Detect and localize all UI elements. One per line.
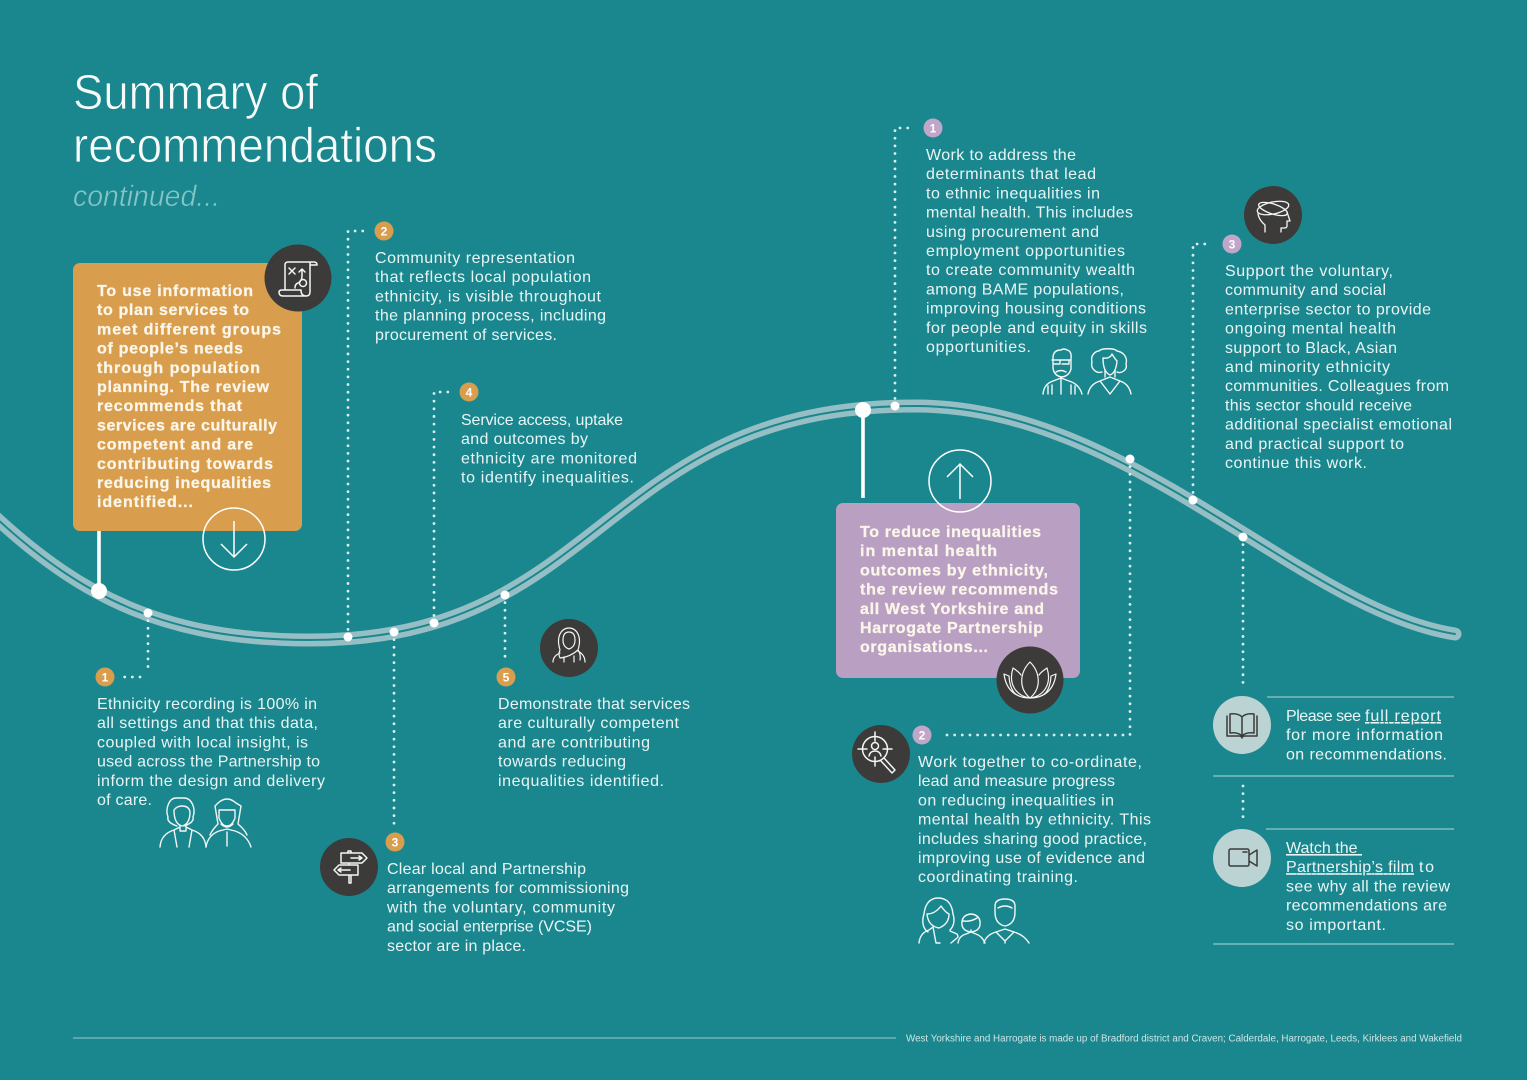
callout: partnership film: to (1419, 859, 1434, 876)
text: amber recommendation 1: Ethnicity recording is 100% in (97, 696, 317, 713)
wave pathway (0, 406, 1455, 640)
text: purple recommendation 2 (912, 726, 1151, 886)
text: amber recommendation 3: and social enterprise (VCSE) (387, 919, 592, 936)
text: purple recommendation 1 (924, 118, 1147, 356)
text: amber recommendation 2 (374, 222, 606, 344)
text: purple recommendation 1: opportunities. (926, 339, 1031, 356)
callout: partnership film: Partnership’s film (1286, 859, 1414, 876)
panel: purple recommendation: all West Yorkshire and (860, 601, 1044, 618)
callout: full report: on recommendations. (1286, 746, 1447, 763)
text: amber recommendation 5: and are contributing (498, 734, 650, 751)
text: amber recommendation 5: are culturally competent (498, 715, 680, 732)
panel: orange recommendation: contributing towards (97, 456, 273, 473)
callout: partnership film: so important. (1286, 917, 1386, 934)
icon: target magnifier person (852, 725, 910, 783)
badge: purple 3: 3 (1229, 238, 1236, 252)
text: purple recommendation 3: and minority ethnicity (1225, 359, 1390, 376)
text: purple recommendation 2: lead and measure progress (918, 773, 1115, 790)
text: purple recommendation 1: mental health. This includes (926, 205, 1133, 222)
callout: partnership film: recommendations are (1286, 898, 1447, 915)
text: purple recommendation 3: additional specialist emotional (1225, 417, 1452, 434)
text: amber recommendation 1: all settings and that this data, (97, 715, 318, 732)
text: amber recommendation 4: ethnicity are monitored (461, 450, 637, 467)
text: purple recommendation 2: improving use of evidence and (918, 850, 1145, 867)
badge: purple 3 (1222, 234, 1242, 254)
badge: amber 5: 5 (503, 670, 510, 684)
text: amber recommendation 2: Community representation (375, 250, 575, 267)
panel: purple recommendation: the review recommends (860, 582, 1058, 599)
text: purple recommendation 3 (1222, 234, 1452, 472)
text: amber recommendation 3: Clear local and Partnership (387, 861, 586, 878)
text: purple recommendation 3: and practical support to (1225, 436, 1404, 453)
panel: purple recommendation: To reduce inequalities (860, 524, 1041, 541)
text: purple recommendation 1: improving housing conditions (926, 301, 1146, 318)
connector: purple panel to wave (855, 402, 871, 498)
text: purple recommendation 2: coordinating training. (918, 869, 1078, 886)
panel: purple recommendation: outcomes by ethnicity, (860, 562, 1048, 579)
panel: orange recommendation: meet different groups (97, 321, 281, 338)
badge: purple 2 (912, 726, 932, 744)
icon: lotus flower (996, 646, 1064, 714)
badge: amber 3 (386, 832, 404, 852)
text: amber recommendation 4 (460, 382, 637, 487)
text: amber recommendation 3: with the voluntary, community (386, 899, 615, 916)
text: amber recommendation 1: used across the Partnership to (97, 754, 320, 771)
icon: scroll with strategy map (264, 244, 332, 312)
callout: partnership film (1213, 829, 1454, 944)
text: purple recommendation 1: Work to address the (926, 147, 1076, 164)
title (73, 66, 437, 173)
title: recommendations (73, 119, 437, 173)
callout: full report: full report (1365, 708, 1442, 725)
text: amber recommendation 3: sector are in place. (387, 938, 526, 955)
text: amber recommendation 4: to identify inequalities. (461, 470, 634, 487)
icon: man with glasses and woman with curly hair (1043, 349, 1131, 394)
callout: full report (1213, 697, 1454, 776)
text: amber recommendation 5 (496, 668, 690, 790)
panel: orange recommendation: competent and are (97, 437, 253, 454)
text: amber recommendation 4: Service access, uptake (461, 412, 623, 429)
text: purple recommendation 1: for people and equity in skills (926, 320, 1147, 337)
text: amber recommendation 3 (386, 832, 629, 955)
icon: up arrow circle (929, 450, 991, 512)
panel: orange recommendation: through population (97, 360, 260, 377)
badge: amber 4 (460, 382, 478, 402)
title: Summary of (73, 66, 318, 120)
icon: family of three (919, 898, 1029, 943)
panel: purple recommendation: organisations... (860, 639, 988, 656)
text: purple recommendation 3: community and social (1225, 282, 1386, 299)
icon: head with orbiting thoughts (1244, 186, 1302, 244)
text: purple recommendation 2: mental health by ethnicity. This (918, 812, 1151, 829)
badge: purple 1 (924, 118, 942, 138)
text: purple recommendation 2: Work together to co-ordinate, (918, 754, 1142, 771)
subtitle: continued: continued... (73, 180, 220, 213)
badge: amber 5 (496, 668, 516, 686)
text: purple recommendation 3: continue this work. (1225, 455, 1367, 472)
icon: open book (1213, 696, 1271, 754)
panel: orange recommendation: services are culturally (97, 417, 277, 434)
callout: full report: Please see (1286, 708, 1361, 725)
panel: orange recommendation: planning. The review (97, 379, 270, 396)
badge: purple 2: 2 (919, 728, 926, 742)
panel: purple recommendation (836, 503, 1080, 678)
text: purple recommendation 1: to create community wealth (926, 262, 1135, 279)
dotted connectors (124, 128, 1243, 825)
text: purple recommendation 1: among BAME populations, (926, 281, 1124, 298)
text: purple recommendation 1: determinants that lead (926, 166, 1096, 183)
text: amber recommendation 4: and outcomes by (461, 431, 588, 448)
icon: signpost (320, 838, 378, 896)
text: amber recommendation 2: procurement of services. (375, 327, 557, 344)
callout: partnership film: Watch the (1286, 840, 1362, 857)
text: purple recommendation 3: Support the voluntary, (1225, 263, 1393, 280)
panel: orange recommendation: to plan services to (97, 302, 249, 319)
icon: woman in hijab (540, 619, 598, 677)
panel: orange recommendation: identified... (97, 494, 193, 511)
text: amber recommendation 5: Demonstrate that services (498, 696, 690, 713)
footer note: West Yorkshire and Harrogate is made up of Bradford district and Craven; Calderdale, Harrogate, Leeds, Kirklees and Wakefield (906, 1034, 1462, 1044)
text: purple recommendation 1: to ethnic inequalities in (926, 185, 1100, 202)
text: purple recommendation 3: support to Black, Asian (1225, 340, 1397, 357)
panel: purple recommendation: in mental health (860, 543, 997, 560)
panel: purple recommendation: Harrogate Partnership (860, 620, 1043, 637)
text: amber recommendation 5: inequalities identified. (498, 773, 664, 790)
icon: video camera (1213, 829, 1271, 887)
text: amber recommendation 2: the planning process, including (375, 308, 606, 325)
badge: amber 1: 1 (102, 670, 109, 684)
badge: amber 1 (96, 668, 114, 686)
badge: amber 2: 2 (381, 224, 388, 238)
text: purple recommendation 3: this sector should receive (1225, 397, 1412, 414)
text: purple recommendation 1: employment opportunities (926, 243, 1125, 260)
text: purple recommendation 1: using procurement and (926, 224, 1099, 241)
callout: full report: for more information (1286, 727, 1443, 744)
badge: amber 2 (374, 222, 394, 240)
icon: down arrow circle (203, 508, 265, 570)
text: amber recommendation 1: of care. (97, 792, 152, 809)
text: amber recommendation 5: towards reducing (498, 754, 626, 771)
icon: two people, woman and man in headdress (160, 798, 251, 847)
panel: orange recommendation: recommends that (97, 398, 243, 415)
text: amber recommendation 2: ethnicity, is visible throughout (375, 288, 602, 305)
text: purple recommendation 2: on reducing inequalities in (918, 792, 1114, 809)
text: purple recommendation 3: enterprise sector to provide (1225, 301, 1431, 318)
text: amber recommendation 1: inform the design and delivery (97, 773, 325, 790)
callout: partnership film: see why all the review (1286, 878, 1450, 895)
text: amber recommendation 1 (96, 668, 325, 809)
badge: amber 3: 3 (392, 836, 399, 850)
text: amber recommendation 2: that reflects local population (375, 269, 591, 286)
panel: orange recommendation: To use information (97, 283, 253, 300)
text: amber recommendation 3: arrangements for commissioning (387, 880, 629, 897)
text: purple recommendation 3: communities. Colleagues from (1225, 378, 1449, 395)
badge: amber 4: 4 (466, 386, 473, 400)
panel: orange recommendation: reducing inequalities (97, 475, 271, 492)
panel: orange recommendation: of people’s needs (97, 341, 243, 358)
connector: orange panel to wave (91, 530, 107, 599)
text: purple recommendation 3: ongoing mental health (1225, 321, 1396, 338)
text: purple recommendation 2: includes sharing good practice, (918, 831, 1147, 848)
badge: purple 1: 1 (930, 122, 937, 136)
text: amber recommendation 1: coupled with local insight, is (97, 734, 308, 751)
panel: orange recommendation (73, 263, 302, 531)
waypoint dots (144, 402, 1248, 642)
